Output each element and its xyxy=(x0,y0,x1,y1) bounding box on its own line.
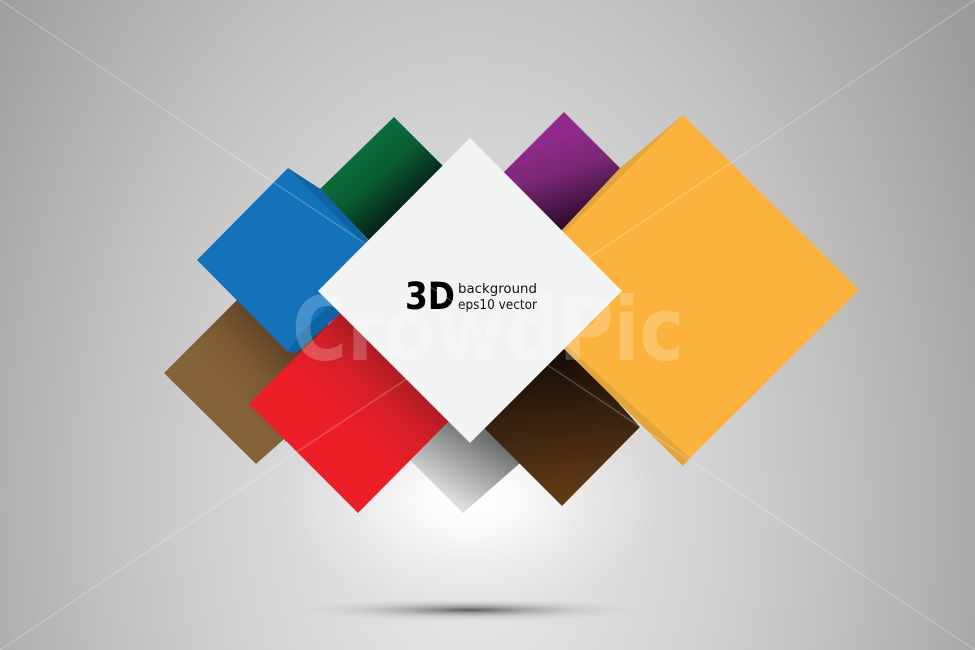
floor shadow xyxy=(300,599,640,621)
panel: dark brown square xyxy=(480,340,640,506)
watermark text: CrowdPic xyxy=(292,278,684,381)
text: background: background xyxy=(458,282,537,297)
panel: red square xyxy=(249,304,460,513)
heading: 3D: 3D xyxy=(405,275,455,318)
panel: brown square xyxy=(164,300,350,464)
panel: blue square xyxy=(197,168,385,353)
panel: white centre square xyxy=(318,138,622,443)
panel: grey square xyxy=(405,400,535,513)
panel: orange square xyxy=(540,115,859,466)
panel: green square xyxy=(320,117,450,248)
panel: purple square xyxy=(497,112,622,238)
text: eps10 vector: eps10 vector xyxy=(458,298,538,313)
